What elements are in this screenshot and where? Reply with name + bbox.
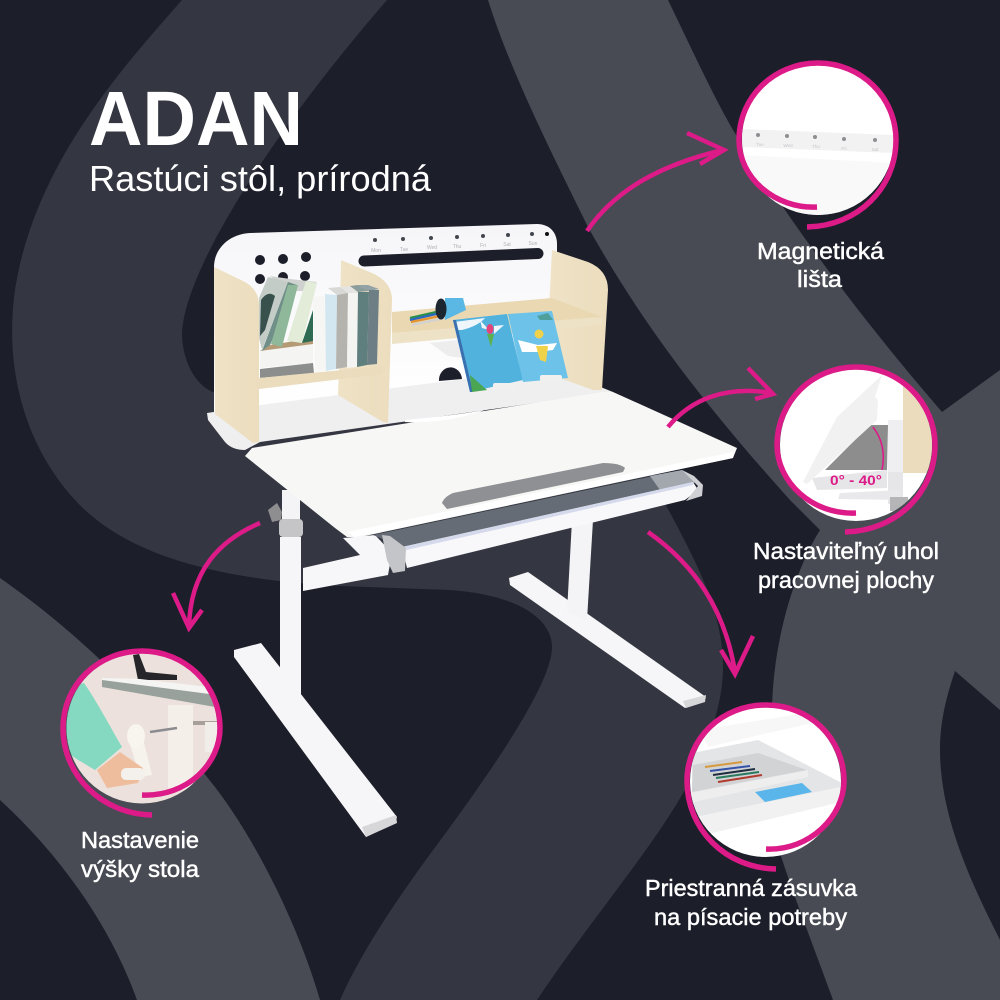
day labels: Wed [427,245,437,251]
photo: magnetic strip [742,66,894,215]
arrow: to drawer [648,532,753,674]
left shelf [259,366,383,389]
calendar dots [373,232,549,242]
pencil cup [410,298,466,325]
label [645,875,857,930]
right panel [549,250,608,390]
label: na písacie potreby [654,904,848,930]
day labels: Mon [371,248,381,254]
ring [777,367,935,532]
desk product illustration [207,224,737,837]
photo: tilted desktop: 0° - 40° [830,473,882,488]
callout: height adjustment [60,648,225,882]
drawer [373,470,703,573]
cross tube and bracket [303,535,392,591]
magnetic slot [364,254,538,261]
arrow: to tilt angle [668,368,773,427]
peg holes [255,252,311,284]
day labels: Tue [400,247,408,253]
rear cavity semicircle [439,367,462,381]
right foot [509,572,706,708]
callout: magnetic strip [739,60,900,292]
photo: tilted desktop [780,370,932,521]
photo: open drawer [690,708,841,857]
label: Nastaviteľný uhol [753,538,939,564]
open picture book [453,311,568,392]
label: lišta [797,266,842,292]
callout: tilt angle [753,365,940,593]
desktop surface [245,392,737,537]
fixed desk strip and tray [207,367,613,450]
label: Nastavenie [81,827,199,853]
ring [739,63,896,227]
title: ADAN [89,76,303,162]
back panel [214,224,557,412]
day labels: Fri [480,243,486,249]
day labels: Sun [529,241,538,247]
photo: magnetic strip: Sat [872,147,879,152]
photo: magnetic strip: Tue [756,142,764,147]
label [757,238,884,292]
books [259,276,379,378]
label [81,827,199,882]
day labels: Sat [503,242,511,248]
label: Magnetická [757,238,884,264]
arrow: to height adjustment [173,523,260,628]
photo: magnetic strip: Wed [783,143,793,148]
day labels: Thu [453,244,462,250]
arrow: to magnetic strip [587,133,724,231]
callout: drawer [645,702,857,930]
day labels [371,241,538,254]
label [753,538,939,593]
middle panel [338,260,392,423]
photo: crank handle [66,654,218,804]
photo: magnetic strip: Thu [812,144,820,149]
label: výšky stola [81,856,199,882]
subtitle: Rastúci stôl, prírodná [89,158,432,199]
right shelf [392,298,602,344]
ring [687,705,844,869]
left foot [234,643,397,837]
label: Priestranná zásuvka [645,875,857,901]
under shelf bracket [430,340,463,358]
label: pracovnej plochy [758,567,935,593]
left side panel [214,267,259,443]
photo: magnetic strip: Fri [841,146,847,151]
grey pad [442,463,625,509]
left post [268,490,303,709]
right post [567,520,593,620]
ring [63,651,220,815]
